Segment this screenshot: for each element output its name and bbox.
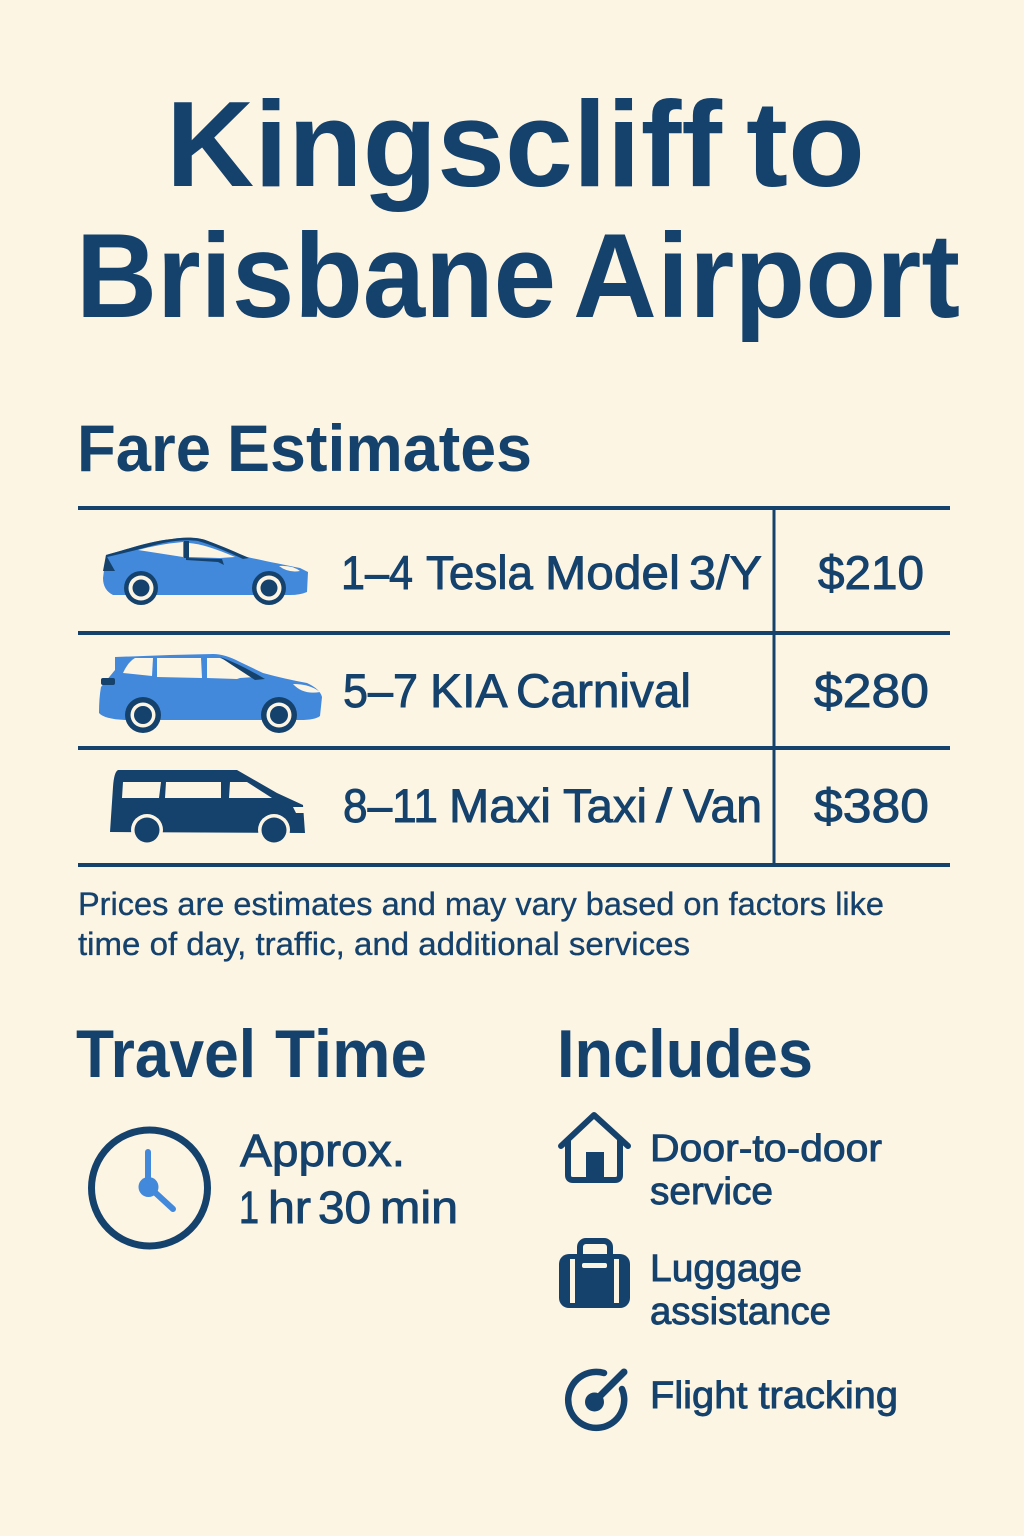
row 2 label: 5–7 xyxy=(343,664,418,717)
text: door-to-door xyxy=(650,1128,882,1213)
travel time value: Approx. xyxy=(240,1125,405,1176)
fare table xyxy=(78,506,950,867)
icon: maxi taxi van xyxy=(110,770,305,846)
text: door-to-door: Door-to-door xyxy=(650,1128,882,1170)
fare note: time of day, traffic, and additional services xyxy=(78,926,690,962)
heading: travel time: Travel xyxy=(76,1016,256,1092)
travel time value: min xyxy=(380,1182,458,1233)
title: to xyxy=(746,76,865,212)
title: Brisbane xyxy=(76,209,556,343)
fare note: Prices are estimates and may vary based on factors like xyxy=(78,886,884,922)
text: luggage assistance: assistance xyxy=(650,1291,831,1333)
title: Kingscliff xyxy=(166,76,722,212)
row 2 price: $280 xyxy=(814,664,929,717)
row 3 label: Maxi xyxy=(449,779,551,832)
row 2 label: KIA xyxy=(430,664,508,717)
row 1 label: 3/Y xyxy=(689,546,762,599)
icon: house xyxy=(561,1115,628,1180)
travel time value: hr xyxy=(268,1182,311,1233)
icon: people mover xyxy=(99,654,322,733)
row 3 label: Taxi xyxy=(563,779,647,832)
row 3 label: / xyxy=(656,779,673,832)
fare note xyxy=(78,886,884,962)
text: door-to-door: service xyxy=(650,1171,773,1213)
travel time value: 30 xyxy=(318,1182,371,1233)
text: flight tracking: Flight tracking xyxy=(650,1375,898,1417)
travel time value: 1 xyxy=(239,1182,259,1233)
icon: clock xyxy=(92,1130,208,1246)
row 1 price: $210 xyxy=(818,546,924,599)
heading: fare estimates: Fare xyxy=(77,411,211,485)
title xyxy=(76,76,960,343)
row 3 label: 8–11 xyxy=(343,779,438,832)
icon: sedan car xyxy=(103,538,308,605)
row 3 price: $380 xyxy=(814,779,929,832)
travel time value xyxy=(239,1125,458,1233)
row 3 label: Van xyxy=(683,779,762,832)
text: luggage assistance: Luggage xyxy=(650,1248,802,1290)
title: Airport xyxy=(573,209,960,343)
icon: luggage xyxy=(559,1241,630,1308)
heading: fare estimates: Estimates xyxy=(227,411,532,485)
heading: includes: Includes xyxy=(557,1016,813,1092)
row 1 label: Model xyxy=(545,546,680,599)
row 2 label: Carnival xyxy=(516,664,691,717)
heading: travel time: Time xyxy=(275,1016,427,1092)
row 1 label: Tesla xyxy=(426,546,534,599)
row 1 label: 1–4 xyxy=(341,546,413,599)
icon: flight tracking target xyxy=(568,1372,624,1428)
text: luggage assistance xyxy=(650,1248,831,1333)
